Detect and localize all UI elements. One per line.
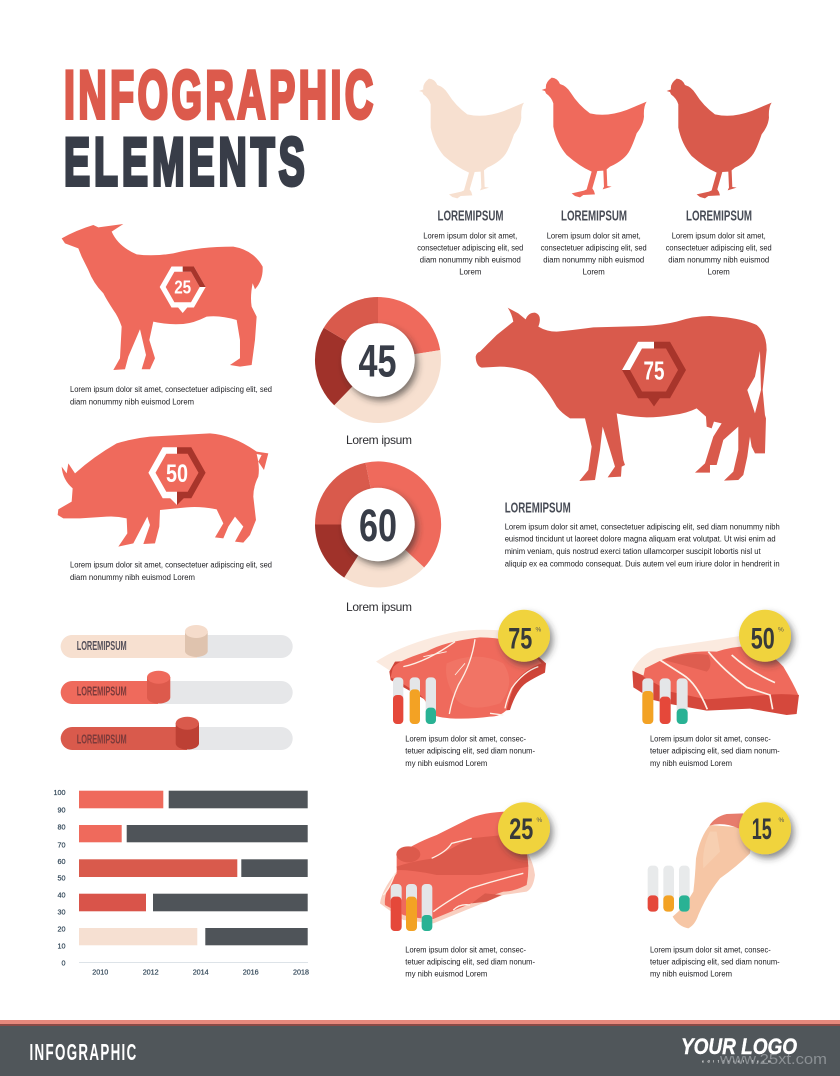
caption: [405, 735, 535, 768]
badge: 25: 25: [174, 278, 191, 298]
x axis labels: 2014: [193, 968, 209, 977]
icon: steak: [632, 636, 799, 715]
badge: 50: [148, 447, 206, 505]
watermark: www.25xt.com: [719, 1051, 827, 1068]
caption: [650, 735, 780, 768]
y axis labels: 70: [58, 840, 66, 850]
hen text 3: Lorem: [708, 268, 730, 277]
y axis labels: 60: [58, 857, 66, 866]
footer: [0, 1020, 840, 1076]
panel: sheep: [62, 224, 272, 406]
panel: pig: [58, 433, 272, 582]
slider 1: LOREMIPSUM: [77, 638, 127, 653]
x axis labels: 2012: [143, 968, 159, 977]
caption: [650, 945, 780, 979]
hen text 2: consectetuer adipiscing elit, sed: [541, 243, 647, 252]
donut chart: 60: 60: [359, 500, 397, 551]
y axis labels: 50: [58, 874, 66, 882]
sheep text: Lorem ipsum dolor sit amet, consectetuer adipiscing elit, sed: [70, 385, 272, 394]
y axis labels: 30: [58, 908, 66, 916]
slider 3: LOREMIPSUM: [77, 731, 127, 746]
caption: tetuer adipiscing elit, sed diam nonum-: [650, 958, 780, 967]
caption: my nibh euismod Lorem: [405, 759, 487, 768]
cow text: euismod tincidunt ut laoreet dolore magna aliquam erat volutpat. Ut wisi enim ad: [505, 535, 776, 544]
slider 1: [61, 625, 293, 658]
panel: hens: [417, 78, 772, 277]
panel: beef cut 25: [380, 802, 550, 979]
caption: Lorem ipsum dolor sit amet, consec-: [650, 735, 771, 744]
slider 2: LOREMIPSUM: [77, 683, 127, 698]
logo: editorial team: [702, 1060, 771, 1064]
x axis labels: 2010: [92, 968, 108, 977]
pig text: Lorem ipsum dolor sit amet, consectetuer adipiscing elit, sed: [70, 561, 272, 570]
hen text 3: Lorem ipsum dolor sit amet,: [672, 231, 766, 240]
badge: 15 percent: %: [778, 817, 784, 824]
caption: [405, 945, 535, 979]
y axis labels: 90: [58, 806, 66, 814]
title: ELEMENTS: [64, 124, 305, 200]
panel: sliders: [61, 625, 293, 750]
y axis labels: 40: [58, 890, 66, 900]
caption: my nibh euismod Lorem: [405, 970, 487, 979]
caption: my nibh euismod Lorem: [650, 759, 732, 768]
y axis labels: 0: [62, 958, 66, 968]
caption: Lorem ipsum dolor sit amet, consec-: [650, 945, 771, 954]
icon: pale hen: [419, 79, 524, 198]
cow text: [505, 522, 780, 568]
icon: coral hen: [542, 78, 647, 197]
logo: YOUR LOGO: [681, 1034, 797, 1059]
icon: roast: [380, 812, 535, 923]
icon: chicken leg: [673, 813, 753, 928]
panel: chicken leg 15: [648, 802, 791, 979]
title: [64, 57, 373, 200]
hen text 3: diam nonummy nibh euismod: [668, 256, 769, 265]
hen headings: LOREMIPSUM: [686, 208, 752, 225]
slider 2: [61, 671, 293, 704]
title: INFOGRAPHIC: [64, 57, 373, 133]
badge: 25 percent: 25: [509, 813, 533, 846]
icon: test tubes: [393, 677, 436, 724]
hen headings: LOREMIPSUM: [438, 208, 504, 225]
caption: Lorem ipsum dolor sit amet, consec-: [405, 735, 526, 744]
icon: test tubes: [648, 866, 690, 912]
badge: 75: 75: [644, 356, 664, 386]
caption: tetuer adipiscing elit, sed diam nonum-: [405, 958, 535, 967]
caption: tetuer adipiscing elit, sed diam nonum-: [405, 747, 535, 756]
cow text: Lorem ipsum dolor sit amet, consectetuer adipiscing elit, sed diam nonummy nibh: [505, 522, 780, 531]
x axis labels: 2018: [293, 968, 309, 977]
y axis labels: 80: [58, 822, 66, 832]
x axis labels: 2016: [243, 968, 259, 977]
bars: [79, 791, 308, 945]
bar chart: [54, 788, 309, 977]
hen text 1: diam nonummy nibh euismod: [420, 256, 521, 265]
icon: beef cut: [376, 630, 546, 719]
icon: pig silhouette: [58, 433, 268, 547]
pig text: [70, 561, 272, 582]
badge: 75 percent: %: [536, 626, 542, 634]
hen headings: LOREMIPSUM: [561, 208, 627, 225]
badge: 50 percent: [739, 610, 791, 662]
caption: Lorem ipsum dolor sit amet, consec-: [405, 945, 526, 954]
icon: sheep silhouette: [62, 224, 263, 370]
badge: 15 percent: [739, 802, 791, 854]
badge: 50 percent: %: [778, 626, 784, 634]
badge: 75 percent: 75: [508, 622, 532, 655]
pig text: diam nonummy nibh euismod Lorem: [70, 573, 195, 582]
y axis labels: 10: [58, 942, 66, 950]
sheep text: diam nonummy nibh euismod Lorem: [70, 398, 194, 406]
footer title: INFOGRAPHIC: [30, 1039, 137, 1065]
donut label: Lorem ipsum: [346, 600, 412, 614]
badge: 25 percent: [498, 802, 550, 854]
icon: test tubes: [642, 678, 688, 724]
hen text 1: Lorem ipsum dolor sit amet,: [423, 231, 517, 240]
badge: 15 percent: 15: [752, 813, 772, 846]
hen text 1: consectetuer adipiscing elit, sed: [417, 243, 523, 252]
badge: 75 percent: [498, 610, 550, 662]
hen text 2: [541, 231, 647, 277]
hen text 2: Lorem: [583, 268, 605, 277]
hen text 1: [417, 231, 523, 277]
cow text: minim veniam, quis nostrud exerci tation ullamcorper suscipit lobortis nisl ut: [505, 547, 762, 556]
donut chart: 60: [315, 461, 441, 587]
donut chart: 45: [315, 297, 441, 423]
y axis labels: [54, 788, 66, 968]
cow heading: LOREMIPSUM: [505, 499, 571, 516]
caption: tetuer adipiscing elit, sed diam nonum-: [650, 747, 780, 756]
badge: 25 percent: %: [536, 817, 542, 824]
hen text 2: Lorem ipsum dolor sit amet,: [547, 231, 641, 240]
cow text: aliquip ex ea commodo consequat. Duis autem vel eum iriure dolor in hendrerit in: [505, 559, 780, 568]
caption: my nibh euismod Lorem: [650, 970, 732, 979]
x axis labels: [92, 968, 309, 977]
badge: 25: [160, 266, 206, 313]
hen headings: [438, 208, 752, 225]
slider 3: [61, 717, 293, 750]
y axis labels: 20: [58, 924, 66, 934]
y axis labels: 100: [54, 788, 66, 797]
icon: test tubes: [391, 884, 432, 931]
hen text 2: diam nonummy nibh euismod: [543, 256, 644, 265]
hen text 1: Lorem: [459, 268, 481, 277]
panel: beef cut 75: [376, 610, 550, 768]
icon: red hen: [667, 79, 772, 198]
badge: 50 percent: 50: [751, 622, 775, 655]
donut label: Lorem ipsum: [346, 433, 412, 447]
badge: 50: 50: [166, 460, 188, 488]
sheep text: [70, 385, 272, 406]
tail gap: [747, 351, 761, 413]
panel: beef cut 50: [632, 610, 799, 768]
donut chart: 45: 45: [358, 336, 396, 386]
badge: 75: [622, 342, 686, 406]
hen text 3: [666, 231, 772, 277]
hen text 3: consectetuer adipiscing elit, sed: [666, 243, 772, 252]
panel: cow: [476, 308, 780, 568]
icon: cow silhouette: [476, 308, 767, 481]
